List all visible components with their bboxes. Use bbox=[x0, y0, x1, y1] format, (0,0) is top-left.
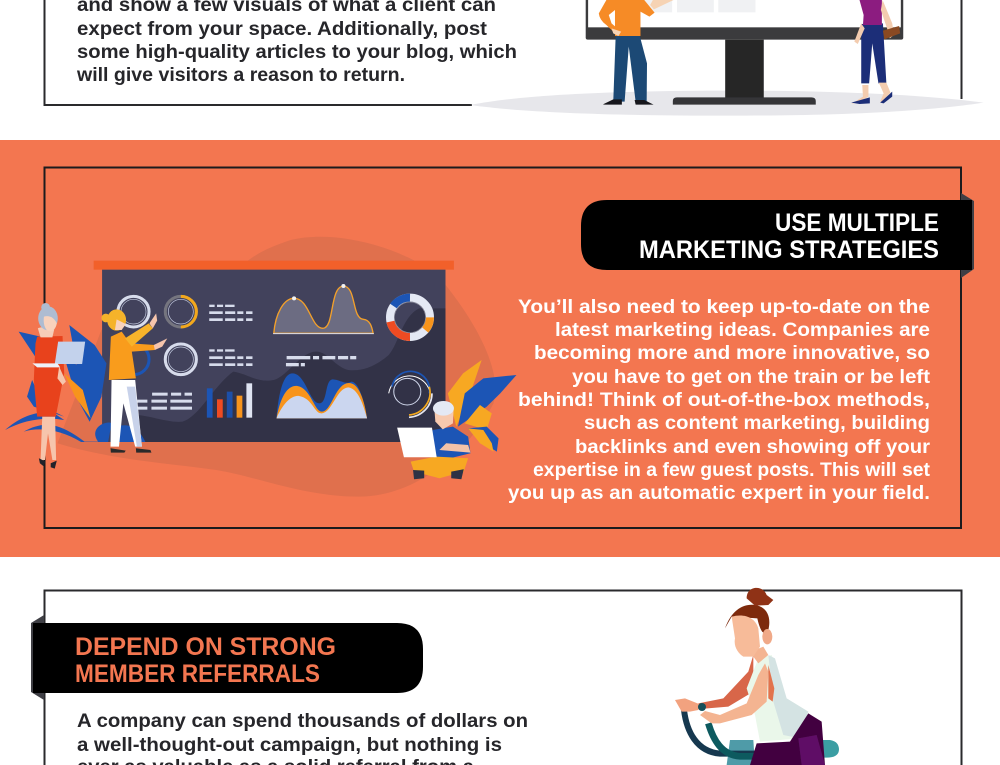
text block: referrals paragraph: a well-thought-out campaign, but nothing is bbox=[77, 734, 502, 756]
figure: man in orange bbox=[599, 0, 674, 105]
chart: line area chart bbox=[273, 284, 374, 334]
panel: bottom section bbox=[31, 588, 962, 765]
icon: leaves right bbox=[448, 360, 516, 452]
banner: Use multiple marketing strategies: MARKETING STRATEGIES bbox=[639, 236, 939, 264]
banner: Use multiple marketing strategies bbox=[581, 193, 974, 278]
figure: seated man with laptop bbox=[397, 401, 470, 479]
text block: marketing strategies paragraph: behind! Think of out-of-the-box methods, bbox=[518, 389, 930, 411]
text block: marketing strategies paragraph: such as content marketing, building bbox=[584, 412, 930, 434]
illustration: presentation board with team bbox=[5, 237, 516, 497]
chart: bar chart bbox=[207, 383, 252, 418]
text block: marketing strategies paragraph: you have to get on the train or be left bbox=[572, 366, 931, 388]
text block: marketing strategies paragraph: expertise in a few guest posts. This will set bbox=[533, 459, 931, 481]
illustration: monitor with two people bbox=[470, 0, 983, 116]
text block: marketing strategies paragraph: You’ll also need to keep up-to-date on the bbox=[518, 296, 930, 318]
chart: text placeholder bars bbox=[137, 305, 356, 410]
figure: woman in purple bbox=[851, 0, 900, 104]
text block: referrals paragraph: A company can spend thousands of dollars on bbox=[77, 710, 528, 732]
text block: marketing strategies paragraph bbox=[508, 296, 931, 504]
panel: orange section background bbox=[0, 140, 1000, 557]
chart: segmented donut bbox=[390, 298, 430, 337]
figure: woman in red dress bbox=[32, 303, 85, 469]
panel: top section bbox=[0, 0, 1000, 140]
text block: marketing strategies paragraph: becoming more and more innovative, so bbox=[534, 342, 930, 364]
text block: marketing strategies paragraph: you up as an automatic expert in your field. bbox=[508, 482, 930, 504]
text block: marketing strategies paragraph: backlinks and even showing off your bbox=[575, 436, 930, 458]
chart: concentric arcs bbox=[389, 371, 432, 417]
icon: blue leaves left bbox=[5, 325, 145, 442]
frame: orange section border bbox=[44, 168, 961, 528]
figure: woman pointing at board bbox=[101, 309, 167, 453]
text block: marketing strategies paragraph: latest marketing ideas. Companies are bbox=[555, 319, 930, 341]
banner: Depend on strong member referrals: DEPEND ON STRONG bbox=[75, 633, 336, 661]
illustration: woman on exercise bike bbox=[675, 588, 839, 765]
chart: stacked area chart bbox=[276, 373, 367, 418]
banner: Depend on strong member referrals bbox=[31, 615, 423, 700]
text block: top paragraph: will give visitors a reason to return. bbox=[76, 64, 405, 86]
text block: top paragraph bbox=[76, 0, 517, 86]
banner: Depend on strong member referrals: MEMBER REFERRALS bbox=[75, 660, 320, 688]
text block: referrals paragraph bbox=[77, 710, 528, 765]
text block: top paragraph: some high-quality articles to your blog, which bbox=[77, 41, 517, 63]
chart: ring gauges bbox=[118, 296, 196, 375]
text block: top paragraph: expect from your space. Additionally, post bbox=[77, 18, 488, 40]
banner: Use multiple marketing strategies: USE MULTIPLE bbox=[775, 209, 939, 237]
